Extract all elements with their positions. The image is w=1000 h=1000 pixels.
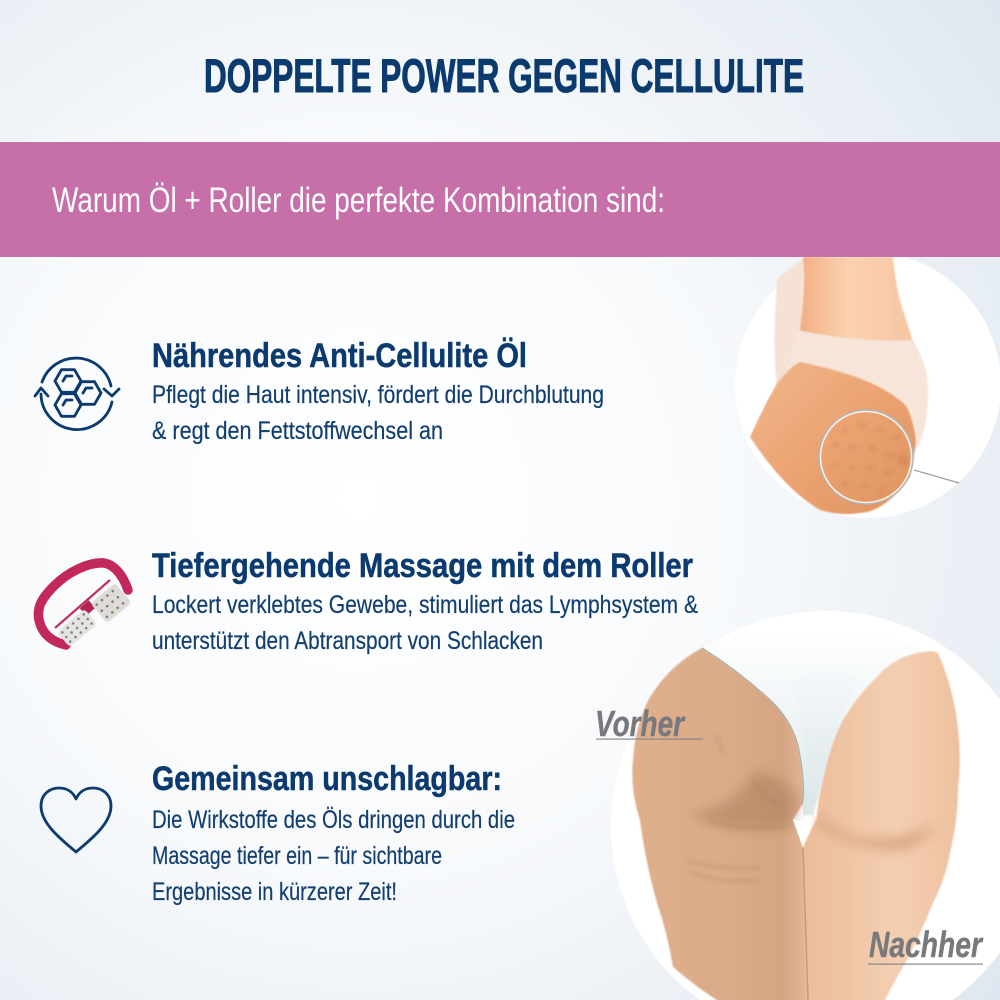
text block: oil: Pflegt die Haut intensiv, fördert die Durchblutung [152,381,604,409]
photo: hip with cellulite magnifier [735,252,1000,518]
label: before: Vorher [595,703,686,744]
banner: Warum Öl + Roller die perfekte Kombination sind: [52,181,665,220]
text block: roller [152,547,698,655]
text block: oil: & regt den Fettstoffwechsel an [152,417,443,445]
icon: molecule with cycle arrows [35,358,119,430]
banner [0,142,1000,257]
icon: magnifier [819,410,959,504]
text block: together: Die Wirkstoffe des Öls dringen durch die [152,806,515,834]
text block: oil: Nährendes Anti-Cellulite Öl [152,336,527,375]
icon: heart [41,788,111,852]
text block: together: Ergebnisse in kürzerer Zeit! [152,878,397,906]
text block: roller: Lockert verklebtes Gewebe, stimuliert das Lymphsystem & [152,591,698,619]
icon: massage roller [38,563,132,647]
text block: oil [152,336,604,445]
text block: together [152,760,515,906]
text block: together: Massage tiefer ein – für sichtbare [152,842,442,870]
text block: roller: Tiefergehende Massage mit dem Roller [152,547,693,585]
photo: before and after [611,611,1000,1000]
text block: roller: unterstützt den Abtransport von Schlacken [152,627,543,655]
text block: together: Gemeinsam unschlagbar: [152,760,502,798]
